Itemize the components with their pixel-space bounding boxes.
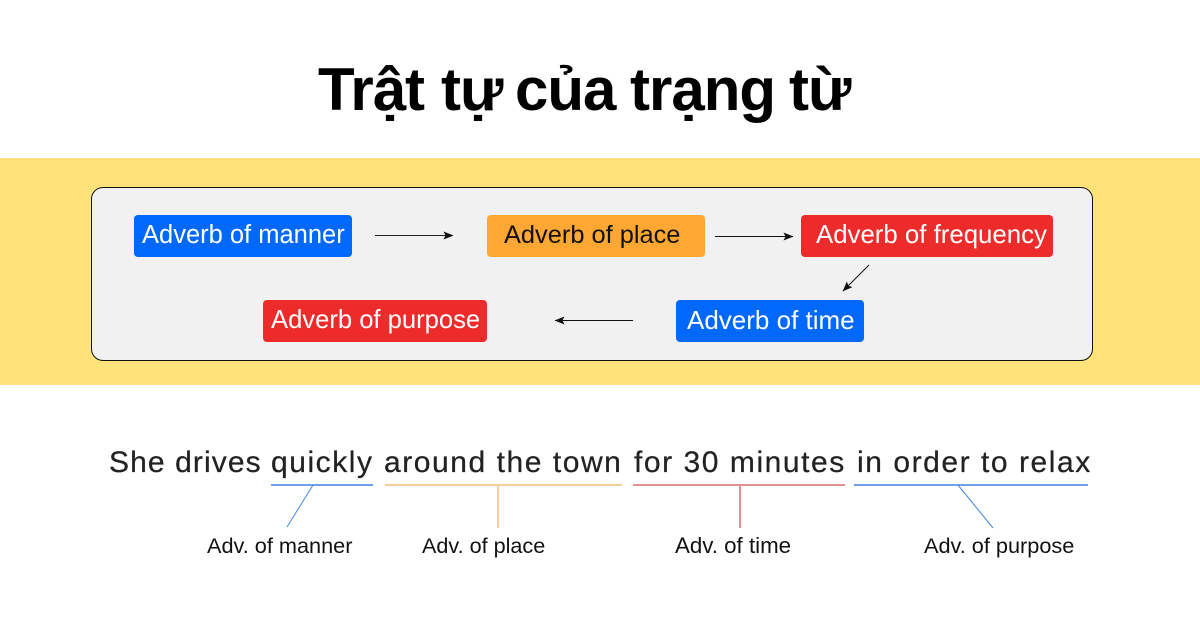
label: adv of place: Adv. of place [422, 533, 545, 558]
box: adverb of place [487, 215, 705, 257]
label: adv of purpose: Adv. of purpose [924, 533, 1074, 558]
box: adverb of place: Adverb of place [504, 221, 680, 249]
connector: manner [271, 485, 373, 527]
panel: adverb order [91, 187, 1093, 361]
connector: place [385, 485, 622, 528]
box: adverb of time: Adverb of time [687, 305, 855, 335]
box: adverb of frequency [801, 215, 1053, 257]
connector: purpose [854, 485, 1088, 528]
title: trạng [630, 56, 775, 123]
title: tự [441, 56, 502, 123]
example sentence [109, 446, 1092, 479]
example sentence: quickly [271, 446, 374, 479]
example sentence: She drives [109, 446, 262, 479]
title: Trật [318, 56, 424, 123]
example sentence: around the town [384, 446, 622, 479]
box: adverb of time [676, 300, 864, 342]
arrow: time to purpose [555, 320, 633, 322]
box: adverb of purpose: Adverb of purpose [271, 306, 480, 334]
box: adverb of purpose [263, 300, 487, 342]
yellow band [0, 158, 1200, 385]
box: adverb of frequency: Adverb of frequency [816, 221, 1047, 249]
box: adverb of manner: Adverb of manner [142, 221, 345, 249]
example sentence: for 30 minutes [634, 446, 846, 479]
arrow: frequency to time [843, 265, 869, 291]
example sentence: in order to relax [857, 446, 1092, 479]
title: của [515, 56, 615, 123]
connector: time [633, 485, 845, 528]
label: adv of manner: Adv. of manner [207, 533, 352, 558]
arrow: manner to place [375, 234, 453, 236]
title: từ [789, 56, 850, 123]
label: adv of time: Adv. of time [675, 533, 791, 558]
arrow: place to frequency [715, 236, 793, 238]
box: adverb of manner [134, 215, 352, 257]
title [318, 56, 852, 123]
